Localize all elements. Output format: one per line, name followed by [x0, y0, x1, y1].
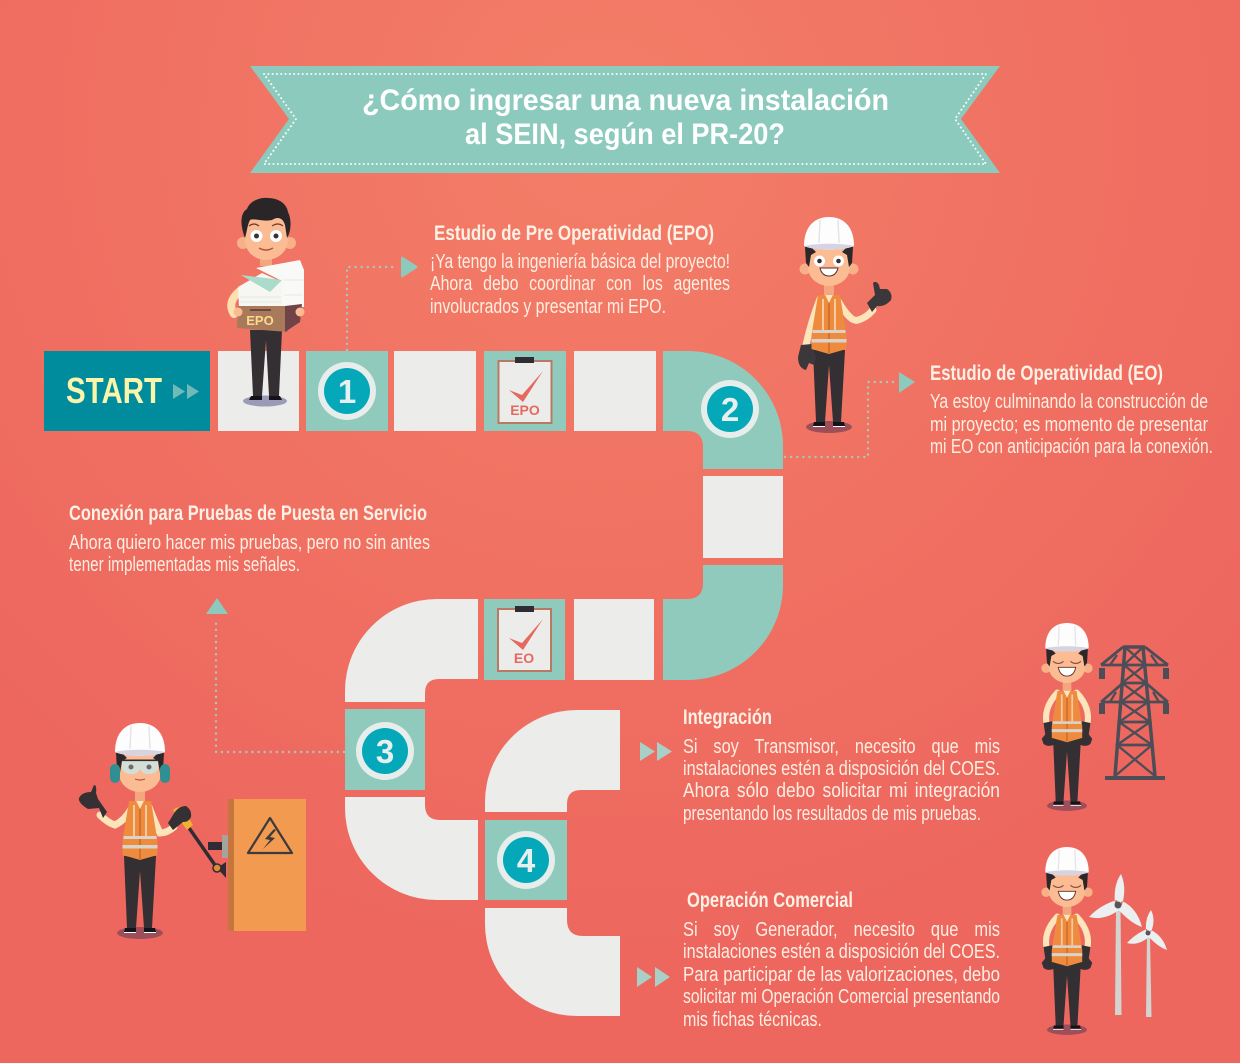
text: integration: Integración: [683, 706, 772, 729]
text: EO: Estudio de Operatividad (EO): [930, 362, 1163, 385]
text: commercial operation: Para participar de las valorizaciones, debo: [683, 964, 1000, 986]
step badge 4: 4: [517, 842, 536, 879]
step badge 4: [497, 831, 555, 889]
character: worker with thumbs up: [798, 217, 892, 433]
step badge 3: 3: [376, 733, 394, 770]
text: commercial operation: solicitar mi Operación Comercial presentando: [683, 986, 1000, 1008]
character: man with EPO box: [231, 198, 304, 406]
character: worker with ear protection at switch: [79, 723, 174, 939]
arrow: step 2 to EO text: [785, 372, 915, 457]
arrow: step 1 to EPO text: [347, 257, 418, 350]
banner with title: ¿Cómo ingresar una nueva instalación: [362, 84, 889, 117]
character: man with EPO box: EPO: [246, 313, 274, 328]
start tile: [44, 351, 210, 431]
board path: [218, 351, 783, 1016]
text: integration: Ahora sólo debo solicitar mi integración: [683, 780, 1000, 802]
clipboard EO: [498, 606, 551, 671]
text: commercial operation: Si soy Generador, necesito que mis: [683, 919, 1000, 941]
banner with title: [250, 66, 1000, 173]
arrows: commercial operation: [637, 967, 670, 987]
text: integration: Si soy Transmisor, necesito que mis: [683, 736, 1000, 758]
text: connection: [69, 502, 430, 576]
step badge 1: [318, 362, 376, 420]
electrical switch cabinet: [168, 799, 306, 931]
character: worker with pylon: [1041, 623, 1093, 811]
character: worker with wind turbines: [1041, 847, 1093, 1035]
text: commercial operation: instalaciones estén a disposición del COES.: [683, 941, 1000, 963]
text: integration: instalaciones estén a disposición del COES.: [683, 758, 1000, 780]
text: EPO: Estudio de Pre Operatividad (EPO): [434, 222, 714, 245]
text: commercial operation: mis fichas técnicas.: [683, 1009, 822, 1031]
icon: transmission tower: [1101, 647, 1168, 778]
text: EPO: ¡Ya tengo la ingeniería básica del proyecto!: [430, 251, 730, 273]
text: integration: [683, 706, 1000, 825]
text: commercial operation: [683, 889, 1000, 1031]
text: commercial operation: Operación Comercial: [687, 889, 853, 912]
icon: wind turbines: [1089, 874, 1167, 1017]
clipboard EPO: [498, 357, 552, 423]
text: connection: Conexión para Pruebas de Puesta en Servicio: [69, 502, 427, 525]
text: connection: tener implementadas mis señales.: [69, 554, 300, 576]
step badge 2: 2: [721, 391, 739, 428]
clipboard EPO: EPO: [510, 402, 540, 418]
text: connection: Ahora quiero hacer mis pruebas, pero no sin antes: [69, 532, 430, 554]
step badge 2: [701, 380, 759, 438]
banner with title: al SEIN, según el PR-20?: [465, 118, 785, 151]
start tile: START: [66, 370, 162, 411]
step badge 1: 1: [338, 373, 356, 410]
clipboard EO: EO: [514, 650, 534, 666]
text: EPO: [430, 222, 730, 318]
text: EO: [930, 362, 1213, 458]
text: EPO: Ahora debo coordinar con los agentes: [430, 273, 730, 295]
step badge 3: [356, 722, 414, 780]
arrows: integration: [640, 742, 672, 761]
text: EPO: involucrados y presentar mi EPO.: [430, 296, 666, 318]
arrow: step 3 to connection text: [206, 598, 344, 752]
text: integration: presentando los resultados de mis pruebas.: [683, 803, 981, 825]
